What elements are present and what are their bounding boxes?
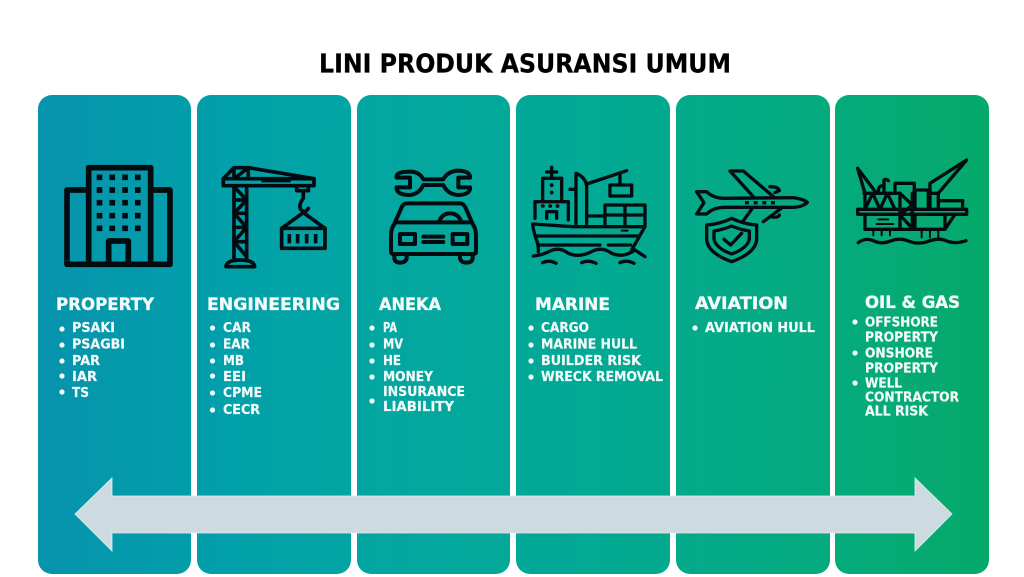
icon: office building xyxy=(67,168,170,264)
list: engineering items: CAR xyxy=(223,321,251,336)
engineering background xyxy=(197,95,351,574)
icon: offshore oil rig xyxy=(858,160,967,243)
list: marine items: BUILDER RISK xyxy=(541,354,642,369)
list: property items xyxy=(59,321,125,401)
panel: engineering xyxy=(197,95,351,574)
list: aneka items: MV xyxy=(383,338,403,352)
list: marine items: MARINE HULL xyxy=(541,338,637,352)
list: marine items: CARGO xyxy=(541,321,589,336)
list: aneka items: LIABILITY xyxy=(383,400,455,415)
heading: aneka: ANEKA xyxy=(379,295,442,315)
list: engineering items: CECR xyxy=(223,403,260,418)
list: marine items xyxy=(528,321,663,385)
panel: oil and gas xyxy=(835,95,989,574)
heading: marine: MARINE xyxy=(535,295,610,315)
arrow: double-headed horizontal arrow xyxy=(75,478,952,551)
list: aneka items xyxy=(369,321,465,415)
heading: aviation: AVIATION xyxy=(695,294,788,314)
icon: tower crane with container xyxy=(223,168,325,267)
panel: marine xyxy=(516,95,670,574)
icon: airplane with shield xyxy=(697,171,807,262)
marine background xyxy=(516,95,670,574)
list: engineering items: CPME xyxy=(223,386,262,401)
list: oil and gas items: ALL RISK xyxy=(865,404,929,420)
list: oil and gas items: WELL xyxy=(865,376,902,392)
list: aviation items: AVIATION HULL xyxy=(705,321,815,336)
heading: property: PROPERTY xyxy=(56,295,155,315)
heading: engineering: ENGINEERING xyxy=(207,295,340,315)
list: aneka items: MONEY xyxy=(383,370,434,385)
list: oil and gas items: PROPERTY xyxy=(865,362,939,376)
heading: oil and gas: OIL & GAS xyxy=(865,293,960,313)
list: engineering items: MB xyxy=(223,354,244,369)
title: LINI PRODUK ASURANSI UMUM xyxy=(319,50,731,80)
icon: cargo ship xyxy=(533,167,645,263)
list: oil and gas items: PROPERTY xyxy=(865,330,939,346)
property background xyxy=(38,95,191,574)
panel: aneka xyxy=(357,95,510,574)
list: engineering items: EAR xyxy=(223,338,250,352)
list: property items: IAR xyxy=(72,370,97,385)
list: property items: PAR xyxy=(72,354,100,369)
list: oil and gas items: OFFSHORE xyxy=(865,316,938,330)
list: oil and gas items xyxy=(852,316,959,420)
list: engineering items xyxy=(210,321,262,418)
panel: aviation xyxy=(676,95,830,574)
list: property items: TS xyxy=(72,386,89,401)
list: aneka items: HE xyxy=(383,354,401,369)
list: property items: PSAGBI xyxy=(72,338,125,352)
list: marine items: WRECK REMOVAL xyxy=(541,370,663,385)
list: aneka items: INSURANCE xyxy=(383,385,465,400)
list: property items: PSAKI xyxy=(72,321,115,336)
oil and gas background xyxy=(835,95,989,574)
list: oil and gas items: CONTRACTOR xyxy=(865,390,959,406)
list: aneka items: PA xyxy=(383,321,397,336)
aneka background xyxy=(357,95,510,574)
list: engineering items: EEI xyxy=(223,370,246,385)
icon: car and wrench xyxy=(391,171,476,263)
panel: property xyxy=(38,95,191,574)
aviation background xyxy=(676,95,830,574)
list: oil and gas items: ONSHORE xyxy=(865,346,933,362)
